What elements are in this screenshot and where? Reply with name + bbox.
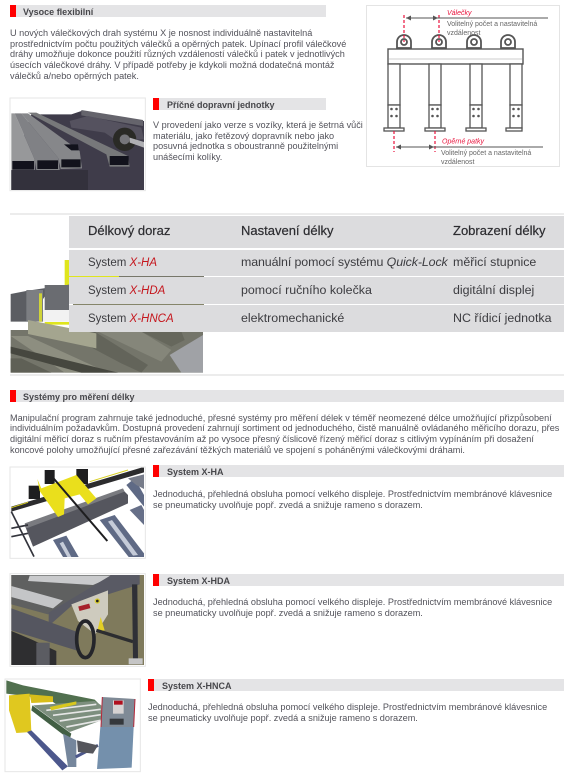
text block: intro paragraph: válečků a/nebo opěrných patek.: [10, 71, 139, 81]
diagram: roller track with rollers and feet: Volitelný počet a nastavitelná: [447, 21, 537, 28]
heading: Příčné dopravní jednotky: Příčné dopravní jednotky: [167, 100, 275, 110]
heading: Příčné dopravní jednotky: [153, 98, 326, 110]
display: X-HDA: digitální displej: [453, 283, 534, 297]
text block: measuring systems: digitální měřicí doraz s ručním přestavováním až po vysoce přesný číslicově řízený měřicí doraz s citlivým vypínáním při dosažení: [10, 434, 534, 444]
setting: X-HA: manuální pomocí systému Quick-Lock: [241, 255, 448, 269]
row: X-HA: System X-HA: [88, 257, 157, 269]
photo: System X-HA: [10, 466, 146, 559]
heading: System X-HA: [153, 465, 564, 477]
text block: transverse units: V provedení jako verze s vozíky, která je šetrná vůči: [153, 120, 363, 130]
row: X-HDA: System X-HDA: [88, 285, 165, 297]
heading: System X-HDA: System X-HDA: [167, 576, 230, 586]
display: X-HNCA: NC řídicí jednotka: [453, 311, 551, 325]
heading: System X-HNCA: System X-HNCA: [162, 681, 232, 691]
dimension lines: [394, 15, 439, 152]
text block: intro paragraph: úsecích válečkové dráhy. V případě potřeby je kdykoli možná dodatečná montáž: [10, 60, 334, 70]
text block: intro paragraph: [10, 28, 346, 81]
text block: System X-HDA: se pneumaticky uvolňuje popř. zvedá a snižuje rameno s dorazem.: [153, 608, 423, 618]
photo: System X-HNCA: [4, 678, 141, 772]
table header and rows: [69, 216, 564, 332]
photo: steel profiles on transverse conveyor: [10, 98, 146, 191]
heading: Systémy pro měření délky: [10, 390, 564, 402]
beam: [388, 49, 523, 64]
legs: [384, 64, 522, 131]
heading: Systémy pro měření délky: Systémy pro měření délky: [23, 392, 135, 402]
diagram: roller track with rollers and feet: Volitelný počet a nastavitelná: [441, 150, 531, 157]
heading: System X-HDA: [153, 574, 564, 586]
heading: System X-HA: System X-HA: [167, 467, 224, 477]
text block: measuring systems: Manipulační program zahrnuje také jednoduché, přesné systémy pro měření délek v téměř neomezené délce umožňující přizpůsobení: [10, 412, 552, 422]
row: X-HNCA: System X-HNCA: [88, 313, 174, 325]
text block: measuring systems: individuálním požadavkům. Dostupná provedení zahrnují sortiment od jednoduchého, čistě manuálně ovládaného měřicího dorazu, přes: [10, 423, 559, 433]
heading: Vysoce flexibilní: [10, 5, 326, 17]
label: Válečky: Válečky: [447, 10, 472, 17]
column heading: Délkový doraz: Délkový doraz: [88, 223, 170, 238]
diagram: roller track with rollers and feet: vzdálenost: [441, 159, 475, 166]
photo: length stop on rollers: [10, 260, 203, 373]
text block: intro paragraph: prostřednictvím počtu použitých válečků a opěrných patek. Upínací profil válečkové: [10, 39, 346, 49]
setting: X-HNCA: elektromechanické: [241, 311, 344, 325]
photo: System X-HDA: [10, 573, 146, 667]
text block: System X-HNCA: se pneumaticky uvolňuje popř. zvedá a snižuje rameno s dorazem.: [148, 713, 418, 723]
heading: Vysoce flexibilní: Vysoce flexibilní: [23, 7, 93, 17]
text block: intro paragraph: U nových válečkových drah systému X je nosnost individuálně nastavitelná: [10, 28, 312, 38]
text block: System X-HA: [153, 489, 552, 510]
setting: X-HDA: pomocí ručního kolečka: [241, 283, 372, 297]
text block: System X-HNCA: [148, 702, 547, 723]
diagram: roller track with rollers and feet: [366, 5, 560, 167]
column heading: Zobrazení délky: Zobrazení délky: [453, 223, 546, 238]
display: X-HA: měřicí stupnice: [453, 255, 536, 269]
text block: measuring systems: koncové polohy umožňující přesné zařezávání těžkých materiálů ve spojení s poháněnými válečkovými dráhami.: [10, 445, 465, 455]
heading: System X-HNCA: [148, 679, 564, 691]
text block: System X-HDA: Jednoduchá, přehledná obsluha pomocí velkého displeje. Prostřednictvím membránové klávesnice: [153, 597, 552, 607]
label: Opěrné patky: Opěrné patky: [442, 138, 485, 146]
text block: intro paragraph: dráhy umožňuje dokonce použití různých vzdáleností válečků i patek v jednotlivých: [10, 49, 345, 59]
icon: rollers: [397, 35, 515, 48]
text block: transverse units: [153, 120, 363, 162]
text block: transverse units: materiálu, jako řetězový dopravník nebo jako: [153, 131, 334, 141]
text block: transverse units: unášecími kolíky.: [153, 152, 222, 162]
column heading: Nastavení délky: Nastavení délky: [241, 223, 334, 238]
text block: System X-HDA: [153, 597, 552, 618]
text block: measuring systems: [10, 412, 559, 455]
text block: transverse units: posuvná jednotka s oboustranně použitelnými: [153, 141, 338, 151]
text block: System X-HA: Jednoduchá, přehledná obsluha pomocí velkého displeje. Prostřednictvím membránové klávesnice: [153, 489, 552, 499]
panel: length stop table: [10, 213, 564, 376]
text block: System X-HNCA: Jednoduchá, přehledná obsluha pomocí velkého displeje. Prostřednictvím membránové klávesnice: [148, 702, 547, 712]
text block: System X-HA: se pneumaticky uvolňuje popř. zvedá a snižuje rameno s dorazem.: [153, 500, 423, 510]
diagram: roller track with rollers and feet: vzdálenost: [447, 30, 481, 37]
